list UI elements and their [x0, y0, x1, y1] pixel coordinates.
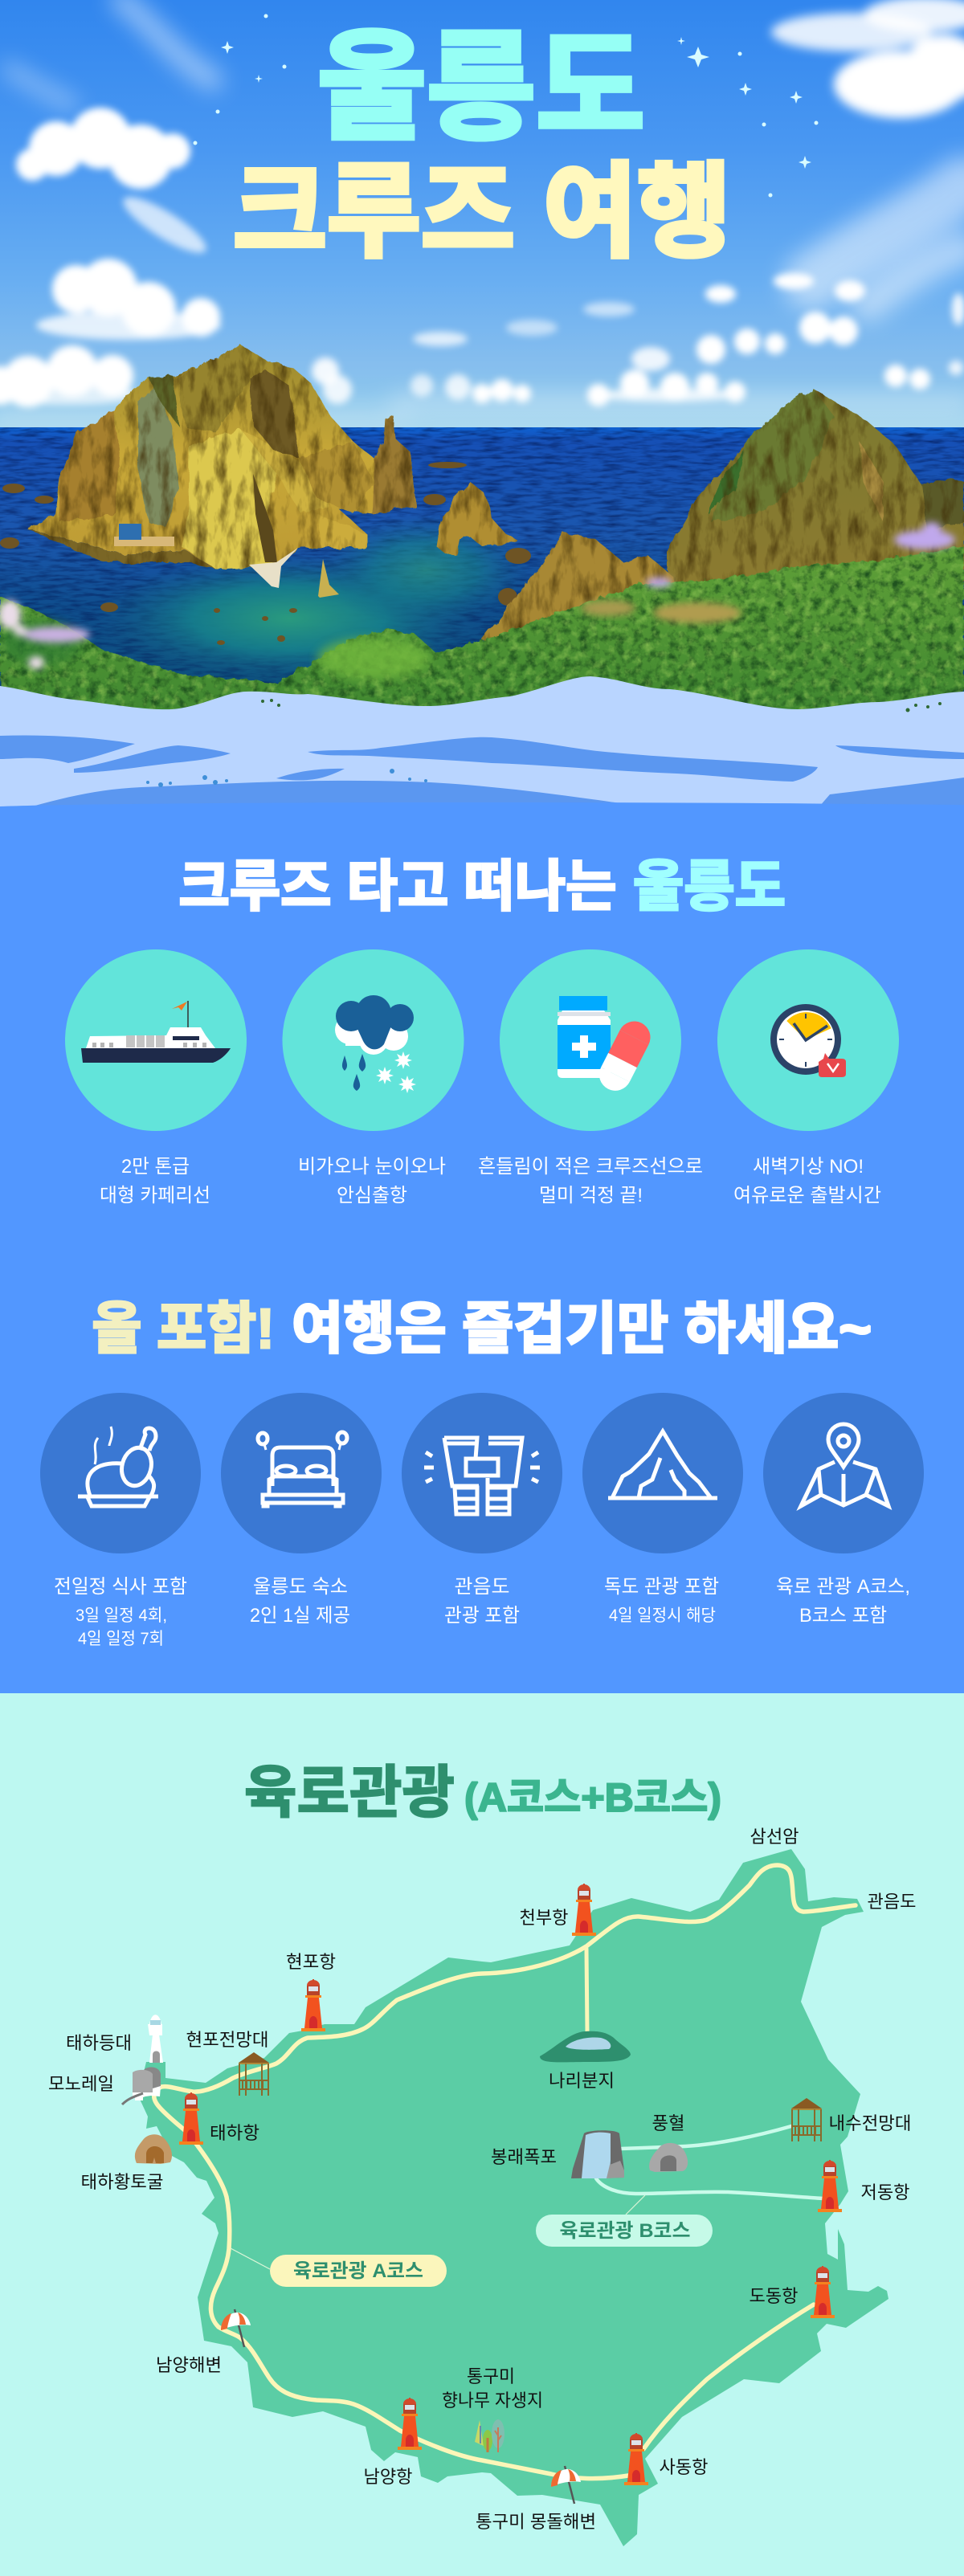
- pill: course A: [270, 2255, 447, 2287]
- item: relaxed departure: [717, 949, 899, 1206]
- text: 4일 일정시 해당: [609, 1606, 716, 1625]
- place labels: 천부항: [519, 1908, 569, 1928]
- pier: [114, 537, 174, 546]
- place labels: 나리분지: [549, 2071, 615, 2091]
- pill: course A: 육로관광 A코스: [293, 2260, 423, 2282]
- place labels: 태하황토굴: [80, 2172, 164, 2192]
- text: 울릉도 숙소: [253, 1576, 348, 1598]
- icon: juniper trees: [475, 2419, 504, 2452]
- sky background: [0, 0, 964, 429]
- icon: medicine bottle and capsule: [558, 996, 656, 1096]
- icon: white Taeha lighthouse: [148, 2015, 163, 2063]
- place labels: 현포항: [286, 1952, 336, 1972]
- dry grass patches: [581, 600, 635, 616]
- heading: 육로관광 (A코스+B코스): (A코스+B코스): [464, 1775, 721, 1820]
- heading: 올 포함! 여행은 즐겁기만 하세요~: 올 포함!: [92, 1297, 275, 1360]
- place labels: 통구미: [467, 2366, 515, 2386]
- panel: land tour map: [0, 1693, 964, 2576]
- place labels: 풍혈: [652, 2113, 684, 2133]
- clouds: [0, 0, 964, 414]
- icon: monorail station: [122, 2068, 161, 2104]
- road: course B: [596, 2126, 823, 2198]
- small rocks: [0, 462, 531, 645]
- icon: Taeha ochre cave: [135, 2134, 172, 2164]
- text: 관음도: [455, 1576, 509, 1598]
- text: 멀미 걱정 끝!: [539, 1185, 643, 1206]
- heading: 올 포함! 여행은 즐겁기만 하세요~: 여행은 즐겁기만 하세요~: [292, 1297, 872, 1360]
- item: Gwaneumdo: [402, 1393, 562, 1627]
- place labels: 태하등대: [66, 2033, 132, 2053]
- sea: [0, 427, 964, 700]
- text: [604, 1576, 719, 1625]
- item: ferry: [65, 949, 247, 1206]
- section background: [0, 802, 964, 1693]
- icon: clock: [770, 1004, 846, 1077]
- item: land tours: [763, 1393, 924, 1627]
- heading: 육로관광 (A코스+B코스): [244, 1762, 721, 1825]
- shadow crack: [253, 474, 277, 562]
- place labels: 현포전망대: [186, 2030, 268, 2050]
- beach: [249, 548, 298, 588]
- wave divider: [0, 676, 964, 813]
- item: lodging: [221, 1393, 382, 1627]
- text: 비가오나 눈이오나: [298, 1156, 446, 1178]
- title: 울릉도: 울릉도: [317, 22, 645, 154]
- icon: ferry: [81, 1001, 231, 1063]
- icon: bed: [258, 1432, 347, 1508]
- small peak: [482, 532, 683, 651]
- place labels: 통구미 몽돌해변: [476, 2512, 596, 2532]
- place labels: 관음도: [868, 1892, 916, 1912]
- text: 3일 일정 4회,: [76, 1606, 167, 1625]
- green cliff vegetation: [0, 522, 964, 723]
- place labels: 남양항: [363, 2467, 413, 2487]
- flowers: [0, 522, 955, 669]
- left island: [27, 344, 415, 588]
- icon: chicken on a plate: [78, 1427, 158, 1506]
- title: 크루즈 여행: 크루즈 여행: [233, 155, 731, 270]
- road: course A: [154, 1865, 856, 2479]
- place labels: 남양해변: [156, 2355, 222, 2375]
- text: 육로 관광 A코스,: [776, 1576, 910, 1598]
- item: Dokdo: [582, 1393, 743, 1625]
- text: [298, 1156, 446, 1206]
- place labels: 향나무 자생지: [442, 2390, 543, 2411]
- item: no seasickness: [478, 949, 703, 1206]
- place labels: [48, 1827, 916, 2532]
- map: Ulleungdo island: [138, 1849, 888, 2546]
- text: 독도 관광 포함: [604, 1576, 719, 1598]
- place labels: 태하항: [210, 2123, 259, 2143]
- text: [478, 1156, 703, 1206]
- leader lines: [231, 2195, 645, 2269]
- text: 2인 1실 제공: [250, 1605, 350, 1627]
- panel: hero photo of Dokdo: [0, 0, 964, 813]
- icon: binoculars: [424, 1438, 540, 1514]
- place labels: 저동항: [861, 2182, 909, 2202]
- right peak: [667, 388, 964, 586]
- text: [54, 1576, 187, 1648]
- panel: cruise benefits and inclusions: [0, 802, 964, 1693]
- place labels: 사동항: [659, 2457, 709, 2477]
- place labels: 내수전망대: [829, 2113, 911, 2133]
- text: 4일 일정 7회: [78, 1630, 164, 1648]
- pill: course B: [536, 2215, 713, 2247]
- pill: course B: 육로관광 B코스: [559, 2220, 691, 2242]
- heading: 크루즈 타고 떠나는 울릉도: 울릉도: [633, 855, 786, 917]
- text: [776, 1576, 910, 1627]
- icon: map pin: [801, 1424, 888, 1506]
- text: [250, 1576, 350, 1627]
- place labels: 도동항: [749, 2286, 799, 2306]
- text: B코스 포함: [799, 1605, 887, 1627]
- text: [100, 1156, 210, 1206]
- icon: observation pavilions: [239, 2052, 822, 2141]
- heading: 크루즈 타고 떠나는 울릉도: 크루즈 타고 떠나는: [178, 855, 617, 917]
- rock arch: [436, 482, 520, 554]
- icon: beach umbrellas: [221, 2309, 581, 2504]
- section background: [0, 1693, 964, 2576]
- place labels: 봉래폭포: [491, 2147, 557, 2167]
- text: 새벽기상 NO!: [753, 1156, 864, 1178]
- icon: wind cave: [649, 2143, 688, 2172]
- heading: 육로관광 (A코스+B코스): 육로관광: [244, 1762, 455, 1825]
- text: 관광 포함: [444, 1605, 520, 1627]
- icon: Bongnae waterfall: [571, 2130, 624, 2178]
- text: 흔들림이 적은 크루즈선으로: [478, 1156, 703, 1178]
- text: 안심출항: [337, 1185, 407, 1206]
- text: 2만 톤급: [121, 1156, 190, 1178]
- place labels: 삼선암: [750, 1827, 799, 1847]
- icon: rocky island: [608, 1431, 717, 1498]
- sparkles: [193, 14, 818, 198]
- text: 전일정 식사 포함: [54, 1576, 187, 1598]
- text: [444, 1576, 520, 1627]
- text: 여유로운 출발시간: [733, 1185, 881, 1206]
- text: [733, 1156, 881, 1206]
- item: weather: [283, 949, 464, 1206]
- bright leaves: [317, 638, 430, 680]
- place labels: 모노레일: [48, 2074, 114, 2094]
- icon: Nari basin: [540, 2031, 631, 2062]
- text: 대형 카페리선: [100, 1185, 210, 1206]
- icon: cloud, rain and snow: [335, 995, 416, 1093]
- item: meals: [40, 1393, 201, 1648]
- icon: lighthouses: [179, 1884, 842, 2485]
